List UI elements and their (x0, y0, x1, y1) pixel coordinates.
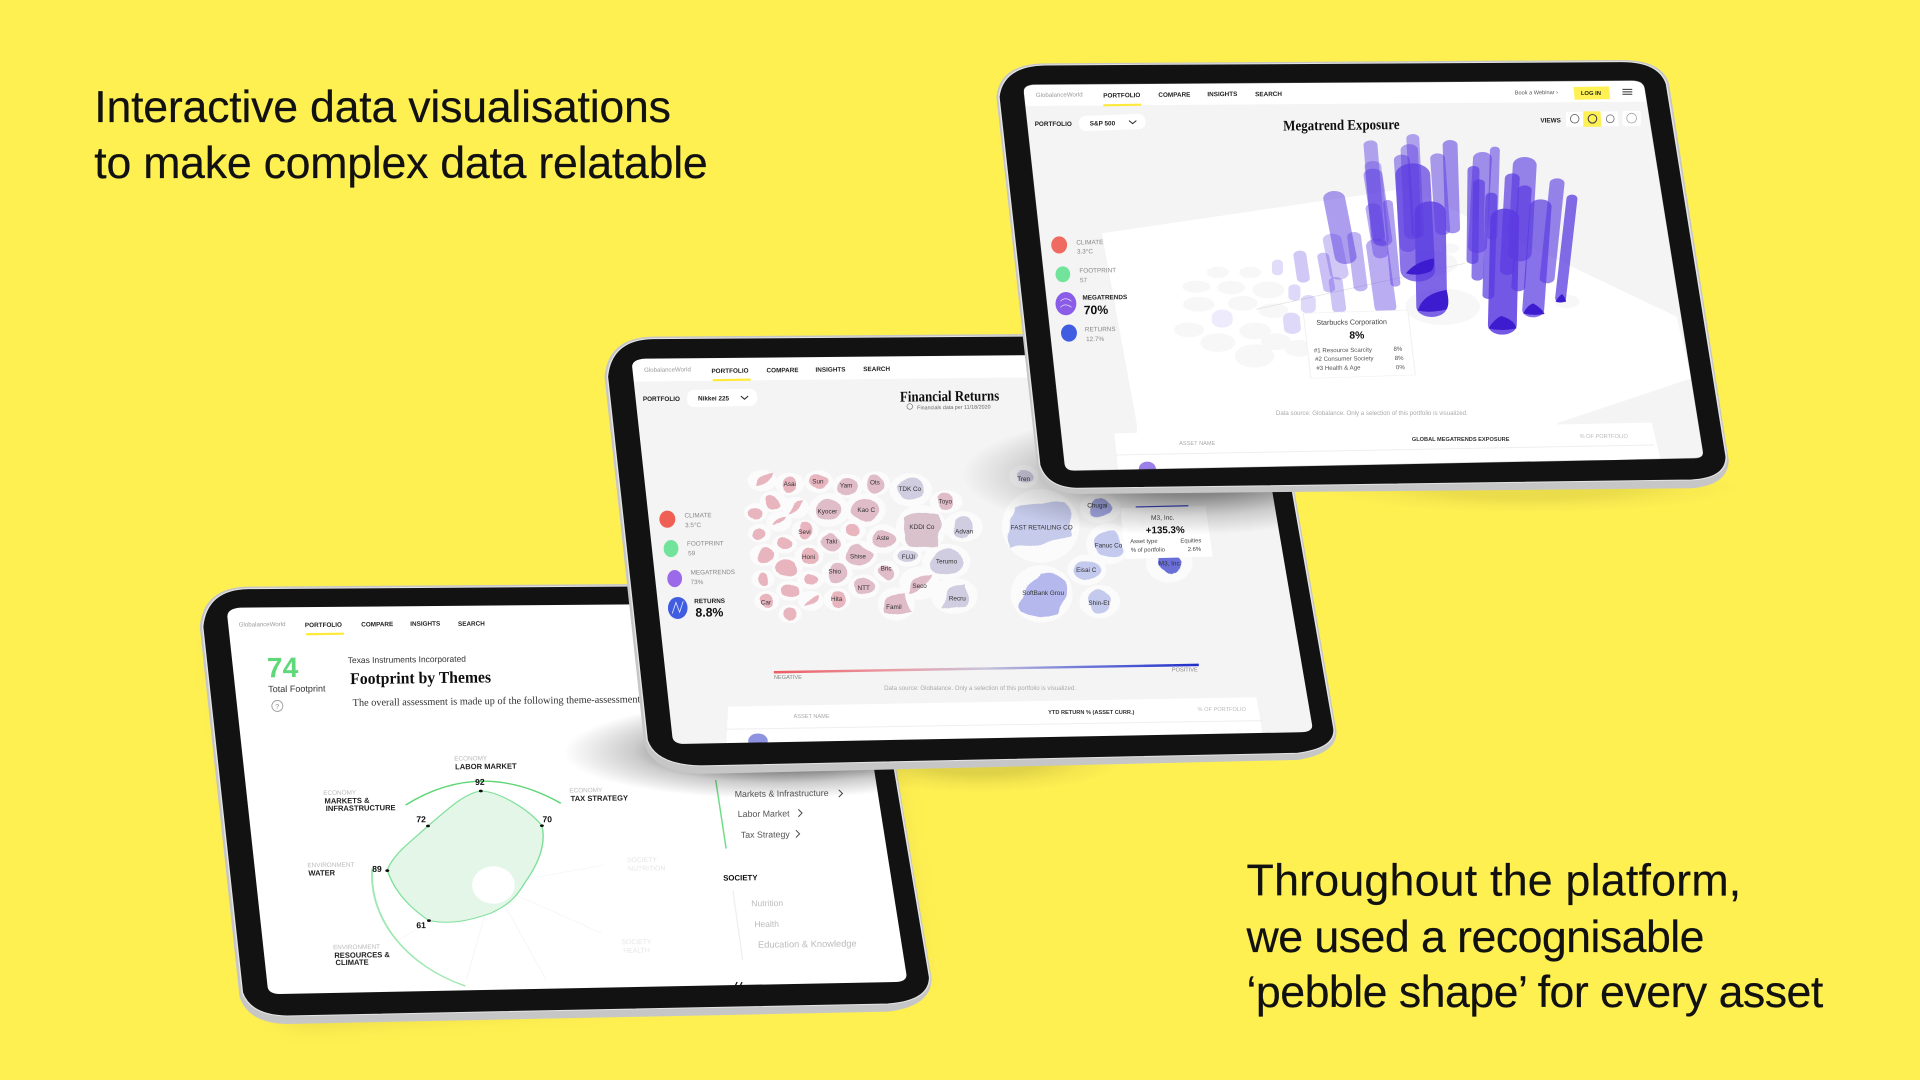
pebble chart: Hita (831, 596, 843, 603)
nav bar (1020, 79, 1649, 106)
tooltip: Starbucks: 8% (1393, 346, 1403, 353)
radar chart: ENVIRONMENT (333, 944, 380, 951)
radar chart: LABOR MARKET (455, 762, 517, 771)
radar chart: ENVIRONMENT (307, 862, 354, 869)
tooltip: Starbucks: 8% (1349, 330, 1364, 342)
nav bar: GlobalanceWorld (644, 366, 691, 374)
legend: 59 (688, 550, 696, 557)
pebble chart: Famil (886, 604, 902, 611)
pebble chart: Aste (876, 535, 890, 542)
radar chart: RESOURCES & (334, 950, 390, 960)
pebble chart: NTT (858, 585, 870, 592)
pebble chart: Yam (840, 482, 852, 489)
radar chart (307, 755, 666, 986)
nav bar (632, 356, 1027, 382)
portfolio selector: Nikkei 225 (698, 395, 730, 402)
heading: bottom right: Throughout the platform, (1247, 857, 1741, 906)
legend (1051, 236, 1127, 343)
tooltip: Starbucks: 8% (1395, 355, 1404, 362)
heading: top left: Interactive data visualisations (94, 83, 671, 132)
views switcher (1540, 111, 1641, 127)
views switcher: VIEWS (1540, 117, 1561, 124)
colour scale (774, 665, 1199, 692)
legend (659, 511, 735, 620)
pebble chart: Eisai C (1076, 567, 1097, 574)
pebble chart: Chugai (1087, 503, 1107, 510)
pebble chart: TDK Co (898, 486, 922, 493)
radar chart: SOCIETY (627, 857, 657, 864)
tooltip: M3: Asset type (1130, 539, 1158, 545)
asset table (726, 698, 1262, 743)
colour scale: NEGATIVE (774, 675, 802, 681)
pebble chart: Toyo (939, 498, 952, 505)
legend: 73% (691, 579, 704, 586)
portfolio selector: PORTFOLIO (643, 396, 680, 403)
pebble chart: Sevi (798, 529, 811, 536)
nav bar: SEARCH (1255, 91, 1282, 98)
pebble chart: Taki (826, 539, 837, 546)
theme list: Nutrition (751, 898, 783, 908)
pebble chart (744, 465, 1192, 623)
tablet: footprint by themes: INSIGHTS (410, 621, 440, 628)
radar chart: INFRASTRUCTURE (326, 803, 396, 813)
nav bar: Book a Webinar › (1515, 90, 1558, 97)
tablet: footprint by themes (200, 584, 932, 1030)
tablet: megatrend exposure (996, 60, 1729, 494)
tooltip: Starbucks: Starbucks Corporation (1316, 318, 1387, 327)
bar chart (1222, 138, 1572, 330)
tablet: footprint by themes: ? (275, 702, 279, 711)
heading: top left: to make complex data relatable (94, 139, 708, 188)
pebble chart: Sun (812, 479, 824, 486)
theme list: Education & Knowledge (758, 939, 857, 950)
heading: bottom right: ‘pebble shape’ for every asset (1247, 968, 1824, 1017)
tablet: footprint by themes: GlobalanceWorld (239, 621, 286, 629)
theme list: SOCIETY (723, 873, 758, 883)
nav bar: SEARCH (863, 366, 891, 373)
tooltip: M3: +135.3% (1146, 525, 1185, 537)
legend: FOOTPRINT (687, 540, 724, 548)
radar chart: 61 (416, 920, 426, 930)
tooltip: Starbucks: #2 Consumer Society (1315, 355, 1374, 363)
pebble chart: Shio (828, 569, 842, 576)
tooltip: M3: Equities (1180, 538, 1201, 545)
legend: MEGATRENDS (691, 569, 735, 577)
asset table: % OF PORTFOLIO (1198, 707, 1247, 713)
nav bar: GlobalanceWorld (1036, 91, 1083, 99)
pebble chart: Kao C (857, 507, 875, 514)
tooltip: Starbucks: #1 Resource Scarcity (1314, 347, 1373, 354)
tablet: footprint by themes: COMPARE (361, 621, 393, 629)
heading: bottom right (1246, 857, 1824, 1017)
pebble chart: Honi (802, 554, 815, 561)
theme list (716, 780, 857, 987)
pebble chart: KDDI Co (909, 524, 935, 531)
nav bar: INSIGHTS (815, 366, 846, 374)
asset table: GLOBAL MEGATRENDS EXPOSURE (1412, 437, 1510, 443)
pebble chart: Terumo (936, 558, 958, 565)
pebble chart: Bric (881, 566, 892, 573)
portfolio selector (1035, 114, 1146, 131)
legend: 70% (1084, 303, 1108, 317)
legend: 8.8% (695, 605, 724, 620)
pebble chart: Recru (949, 596, 966, 603)
tooltip: Starbucks: 0% (1396, 364, 1405, 371)
radar chart: 92 (475, 777, 485, 787)
pebble chart: Shin-Et (1088, 600, 1110, 607)
legend: MEGATRENDS (1082, 294, 1127, 302)
radar chart: 72 (416, 814, 426, 824)
tooltip: M3: % of portfolio (1131, 547, 1166, 554)
pebble chart: FAST RETAILING CO (1011, 525, 1073, 532)
legend: FOOTPRINT (1079, 267, 1116, 275)
legend: 3.3°C (1077, 247, 1093, 256)
theme list: Health (754, 919, 779, 929)
pebble chart: Asai (784, 481, 796, 488)
tablet: footprint by themes: Footprint by Themes (350, 667, 492, 688)
colour scale: Data source: Globalance. Only a selection of this portfolio is visualized. (884, 685, 1076, 692)
chart title: Megatrend Exposure (1283, 117, 1400, 135)
tooltip: M3 (1121, 506, 1213, 559)
tooltip: Starbucks (1303, 310, 1415, 378)
radar chart: CLIMATE (335, 958, 369, 967)
tablet: footprint by themes: Total Footprint (268, 683, 326, 694)
theme list: Tax Strategy (741, 829, 790, 840)
pebble chart: M3, Inc. (1159, 561, 1182, 568)
asset table: % OF PORTFOLIO (1580, 434, 1629, 440)
chart title (900, 390, 999, 410)
heading: top left (94, 83, 708, 188)
nav bar: COMPARE (1158, 92, 1190, 99)
radar chart: WATER (308, 868, 336, 878)
tooltip: Starbucks: #3 Health & Age (1316, 365, 1361, 372)
pebble chart: Fanuc Co (1095, 542, 1123, 549)
theme list: Markets & Infrastructure (735, 788, 829, 799)
portfolio selector (643, 389, 757, 407)
portfolio selector: PORTFOLIO (1035, 121, 1072, 128)
legend: 3.5°C (685, 521, 702, 529)
radar chart: ECONOMY (323, 789, 357, 797)
legend: 57 (1080, 277, 1088, 284)
portfolio selector: S&P 500 (1090, 121, 1116, 128)
tablet: footprint by themes: 74 (267, 652, 299, 683)
theme list: Labor Market (738, 808, 790, 819)
pebble chart: Seco (912, 583, 927, 590)
legend: RETURNS (694, 598, 725, 605)
pebble chart: SoftBank Grou (1022, 590, 1064, 597)
shadow on returns tablet (976, 434, 1278, 531)
pebble chart: Shise (850, 553, 866, 560)
pebble chart: Kyocer (817, 509, 838, 516)
pebble chart: Car (761, 599, 772, 606)
tooltip: M3: M3, Inc. (1151, 515, 1175, 522)
floor plane (1102, 190, 1691, 432)
shadow on footprint tablet (575, 716, 877, 796)
tablet: footprint by themes: The overall assessment is made up of the following theme-assessments (353, 694, 644, 709)
radar chart: TAX STRATEGY (571, 793, 628, 803)
legend: CLIMATE (1076, 239, 1103, 246)
asset table: ASSET NAME (793, 714, 830, 720)
radar chart: SOCIETY (621, 939, 652, 946)
radar chart: NUTRITION (628, 865, 666, 873)
legend: CLIMATE (684, 512, 712, 520)
tablet: footprint by themes: PORTFOLIO (305, 622, 342, 629)
pebble chart: Advan (955, 528, 974, 535)
radar chart: 70 (542, 814, 552, 824)
nav bar: INSIGHTS (1207, 91, 1237, 98)
nav bar: PORTFOLIO (1103, 92, 1140, 100)
asset table: ASSET NAME (1179, 441, 1216, 447)
tablet: footprint by themes: Texas Instruments Incorporated (348, 654, 466, 665)
radar chart: 89 (372, 864, 382, 874)
tablet: footprint by themes: SEARCH (458, 621, 485, 628)
pebble chart: Ots (870, 479, 880, 486)
tablet: financial returns (604, 334, 1336, 774)
colour scale: POSITIVE (1172, 668, 1198, 674)
chart title: Financial Returns (900, 388, 999, 406)
pebble chart: FUJI (902, 554, 915, 561)
radar chart: HEALTH (623, 947, 650, 955)
legend: RETURNS (1085, 326, 1116, 333)
shadow under megatrend tablet on background (1310, 460, 1751, 514)
asset table (1114, 423, 1660, 470)
pebble chart: Tren (1017, 476, 1031, 483)
tablet: megatrend exposure: Data source: Globalance. Only a selection of this portfolio is visualized. (1276, 410, 1468, 417)
radar chart: MARKETS & (324, 796, 370, 806)
shadow under returns tablet on background (833, 730, 1127, 793)
nav bar: PORTFOLIO (711, 368, 749, 375)
legend: 12.7% (1086, 336, 1105, 343)
radar chart: ECONOMY (454, 755, 488, 763)
nav bar: COMPARE (766, 367, 799, 374)
icon: clock (907, 404, 913, 409)
heading: bottom right: we used a recognisable (1246, 913, 1704, 962)
asset table: YTD RETURN % (ASSET CURR.) (1048, 710, 1135, 716)
nav bar: LOG IN (1581, 91, 1601, 97)
chart title: Financials data per 11/18/2020 (917, 405, 991, 411)
tooltip: M3: 2.6% (1188, 547, 1201, 553)
radar chart: ECONOMY (569, 787, 603, 794)
